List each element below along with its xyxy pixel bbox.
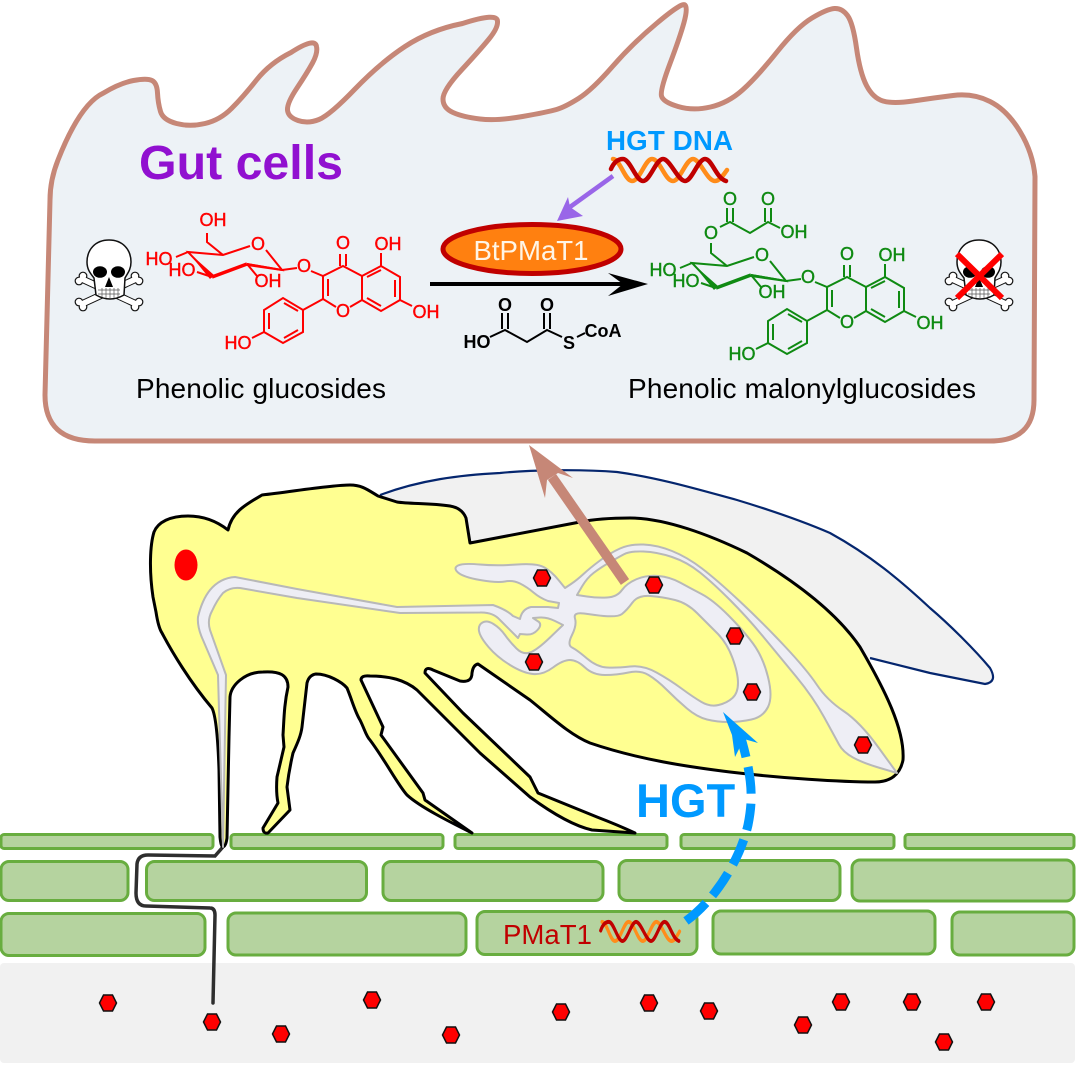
metabolites in gut — [526, 570, 872, 753]
molecule: phenolic malonylglucoside (green): HO — [672, 271, 700, 291]
icon: skull toxic — [75, 240, 143, 311]
metabolites in phloem — [100, 992, 994, 1050]
soil: phloem background — [0, 963, 1075, 1063]
label: phenolic glucosides: Phenolic glucosides — [136, 373, 386, 404]
molecule: phenolic malonylglucoside (green): OH — [878, 245, 906, 265]
molecule: phenolic malonylglucoside (green): OH — [780, 222, 808, 242]
arrow: gut to gut cells — [529, 445, 625, 582]
molecule: phenolic glucoside (red): OH — [200, 210, 226, 230]
molecule: phenolic malonylglucoside (green): OH — [916, 313, 944, 333]
insect wing — [380, 470, 993, 684]
molecule: malonyl-CoA: O — [540, 295, 554, 315]
molecule: phenolic malonylglucoside (green): O — [755, 245, 769, 265]
molecule: malonyl-CoA: O — [498, 295, 512, 315]
molecule: phenolic glucoside (red): O — [297, 256, 311, 276]
insect gut — [198, 544, 897, 847]
molecule: phenolic glucoside (red): OH — [374, 234, 402, 254]
molecule: phenolic glucoside (red): O — [336, 233, 350, 253]
molecule: phenolic glucoside (red): OH — [254, 271, 282, 291]
icon: crossed-out skull non-toxic — [945, 240, 1013, 311]
molecule: phenolic malonylglucoside (green): OH — [758, 282, 786, 302]
molecule: phenolic malonylglucoside (green): O — [723, 189, 737, 209]
label: HGT: HGT — [636, 774, 736, 827]
label: HGT DNA: HGT DNA — [606, 125, 733, 156]
molecule: phenolic glucoside (red): O — [251, 234, 265, 254]
icon: PMaT1 DNA helix — [601, 922, 680, 941]
molecule: malonyl-CoA — [464, 295, 622, 353]
molecule: malonyl-CoA: CoA — [584, 321, 622, 341]
heading: gut cells: Gut cells — [139, 136, 343, 190]
molecule: malonyl-CoA: HO — [464, 332, 490, 352]
molecule: phenolic malonylglucoside (green): O — [704, 223, 718, 243]
enzyme: BtPMaT1: BtPMaT1 — [473, 235, 589, 266]
molecule: phenolic glucoside (red): HO — [168, 260, 196, 280]
molecule: phenolic malonylglucoside (green): O — [840, 244, 854, 264]
molecule: phenolic malonylglucoside (green): O — [801, 267, 815, 287]
molecule: phenolic malonylglucoside (green): O — [840, 312, 854, 332]
enzyme: BtPMaT1 — [443, 224, 621, 274]
icon: HGT DNA helix — [611, 159, 727, 181]
molecule: phenolic malonylglucoside (green): HO — [728, 344, 756, 364]
molecule: phenolic malonylglucoside (green) — [650, 189, 944, 364]
arrow: reaction — [430, 273, 648, 296]
panel: gut cells — [45, 5, 1035, 441]
insect stylet — [136, 848, 222, 1003]
arrow: HGT dashed — [686, 712, 758, 921]
molecule: phenolic glucoside (red) — [146, 210, 440, 353]
molecule: phenolic glucoside (red): O — [336, 301, 350, 321]
molecule: phenolic malonylglucoside (green): HO — [650, 260, 676, 280]
label: phenolic malonylglucosides: Phenolic malonylglucosides — [628, 373, 976, 404]
molecule: phenolic glucoside (red): HO — [146, 249, 172, 269]
label: PMaT1: PMaT1 — [503, 919, 592, 950]
plant cells — [1, 834, 1074, 956]
molecule: phenolic glucoside (red): HO — [224, 333, 252, 353]
molecule: phenolic malonylglucoside (green): O — [761, 189, 775, 209]
arrow: HGT DNA to enzyme — [557, 176, 613, 221]
molecule: phenolic glucoside (red): OH — [412, 302, 440, 322]
insect eye — [174, 550, 198, 580]
insect body — [150, 485, 903, 847]
molecule: malonyl-CoA: S — [563, 333, 575, 353]
